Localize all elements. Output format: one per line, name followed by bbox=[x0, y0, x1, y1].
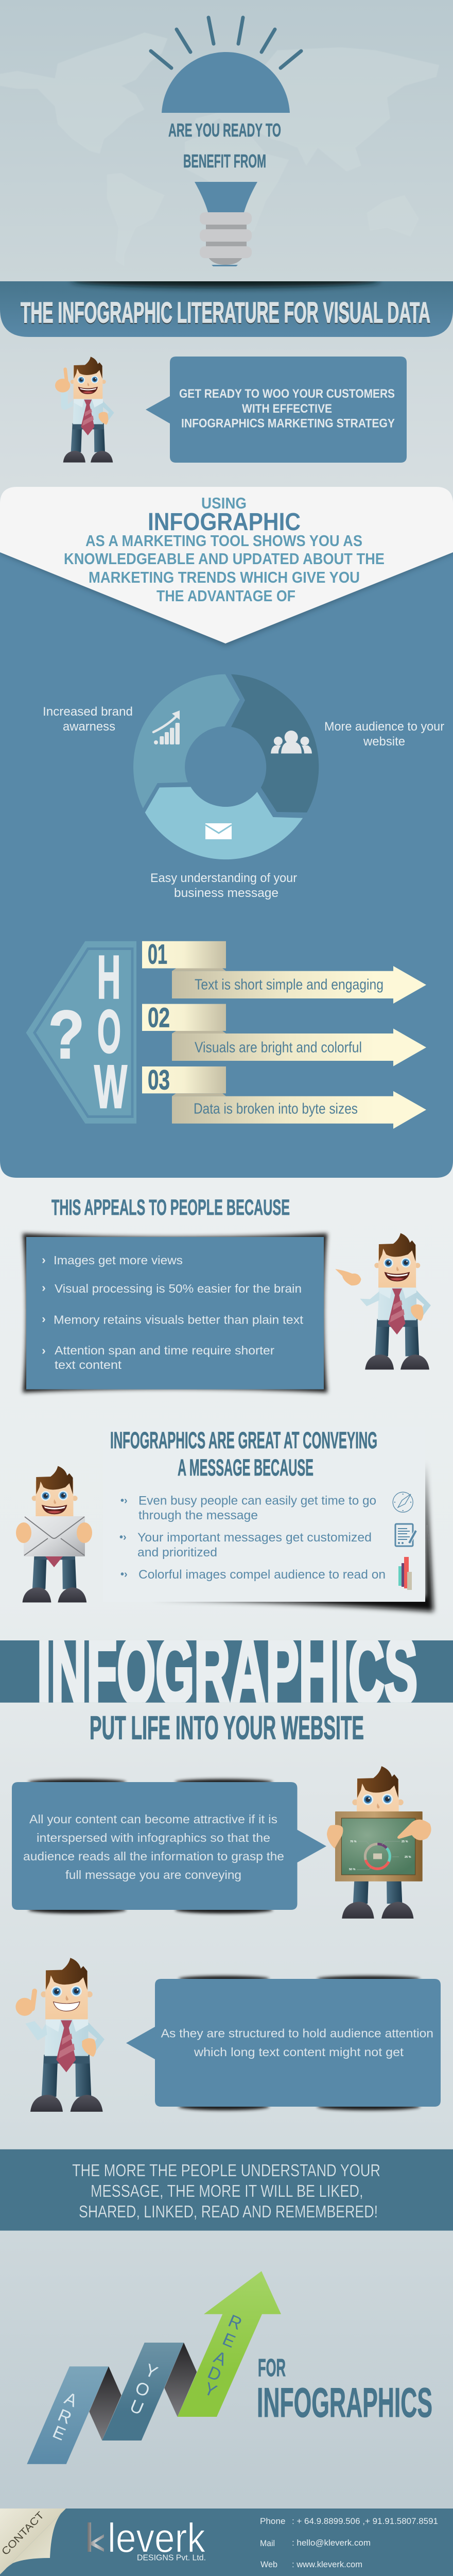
speech callout: hold attention: which long text content might not get bbox=[194, 2045, 404, 2059]
panel: appeals list: Images get more views bbox=[54, 1253, 183, 1267]
footer bbox=[0, 2509, 453, 2576]
envelope bbox=[24, 1516, 85, 1556]
heading: for infographics bbox=[257, 2354, 432, 2426]
donut labels bbox=[43, 705, 444, 900]
band: the more the people understand: SHARED, LINKED, READ AND REMEMBERED! bbox=[79, 2202, 378, 2222]
character: pointing finger bbox=[55, 357, 114, 463]
word: ready bbox=[201, 2311, 245, 2401]
panel: using infographic, blue section bbox=[0, 487, 453, 1178]
heading: are you ready to benefit from: BENEFIT FROM bbox=[183, 150, 266, 172]
donut labels: More audience to your bbox=[324, 720, 444, 734]
reasons list: through the message bbox=[138, 1509, 258, 1522]
character: presenting bbox=[335, 1233, 431, 1369]
badge: how? bbox=[26, 941, 136, 1124]
speech callout: attractive content: interspersed with infographics so that the bbox=[37, 1831, 270, 1844]
reasons list: Your important messages get customized bbox=[137, 1531, 372, 1545]
badge: how?: O bbox=[97, 997, 121, 1066]
ribbon step 02: 02 bbox=[148, 1002, 170, 1033]
reasons list: •› bbox=[119, 1532, 127, 1543]
ribbon step 03 bbox=[142, 1065, 426, 1129]
ribbon step 01: 01 bbox=[148, 939, 167, 970]
title banner bbox=[0, 281, 453, 337]
panel: appeals list: Attention span and time require shorter bbox=[55, 1344, 274, 1357]
speech callout: woo your customers: INFOGRAPHICS MARKETING STRATEGY bbox=[181, 416, 395, 431]
contact details: : hello@kleverk.com bbox=[292, 2538, 371, 2548]
icon: colourful bars bbox=[398, 1557, 412, 1590]
heading text: using infographic: THE ADVANTAGE OF bbox=[156, 587, 295, 605]
badge: how?: H bbox=[97, 943, 120, 1012]
icon: compass bbox=[393, 1492, 413, 1512]
reasons list bbox=[119, 1494, 386, 1582]
heading text: using infographic: USING bbox=[201, 494, 247, 512]
chalkboard: 50 % bbox=[349, 1868, 356, 1871]
speech callout: woo your customers bbox=[146, 357, 407, 463]
panel: appeals list: Memory retains visuals better than plain text bbox=[54, 1313, 303, 1327]
ribbon step 02: Visuals are bright and colorful bbox=[195, 1039, 362, 1056]
word: you: Y bbox=[142, 2360, 160, 2383]
panel: appeals list: › bbox=[42, 1253, 46, 1266]
panel: conveying a message bbox=[103, 1427, 433, 1612]
logo: kleverk: leverk bbox=[108, 2515, 206, 2561]
word: are: R bbox=[55, 2405, 74, 2428]
chalkboard: 76 % bbox=[350, 1840, 357, 1843]
bulb dome bbox=[162, 52, 290, 113]
hands bbox=[16, 1522, 92, 1543]
word: ready: E bbox=[220, 2329, 238, 2352]
band: the more the people understand bbox=[0, 2149, 453, 2231]
heading text: using infographic: AS A MARKETING TOOL SHOWS YOU AS bbox=[85, 532, 362, 550]
donut chart bbox=[133, 674, 319, 859]
band: the more the people understand: MESSAGE, THE MORE IT WILL BE LIKED, bbox=[91, 2182, 363, 2201]
bulb screw base bbox=[200, 212, 252, 266]
word: are: E bbox=[50, 2422, 68, 2445]
word: ready: D bbox=[205, 2363, 224, 2385]
heading text: using infographic bbox=[64, 494, 385, 605]
chalkboard: 25 % bbox=[405, 1856, 411, 1859]
panel: appeals list: Visual processing is 50% easier for the brain bbox=[55, 1282, 302, 1295]
contact details: : www.kleverk.com bbox=[292, 2560, 362, 2569]
panel: appeals list: text content bbox=[55, 1358, 121, 1371]
logo: kleverk: DESIGNS Pvt. Ltd. bbox=[137, 2553, 206, 2562]
heading text: using infographic: MARKETING TRENDS WHICH GIVE YOU bbox=[89, 568, 360, 586]
donut labels: awarness bbox=[63, 720, 115, 734]
panel: appeals list: › bbox=[42, 1344, 46, 1357]
badge: how?: ? bbox=[48, 997, 84, 1073]
word: are: A bbox=[62, 2388, 80, 2411]
speech callout: attractive content: All your content can become attractive if it is bbox=[29, 1812, 277, 1826]
panel: appeals list bbox=[23, 1233, 327, 1393]
world map backdrop bbox=[0, 32, 439, 266]
word: ready: Y bbox=[201, 2379, 219, 2401]
icon: growth chart bbox=[153, 710, 180, 744]
speech callout: hold attention bbox=[126, 1976, 441, 2110]
panel: appeals list: › bbox=[42, 1281, 46, 1294]
badge: how?: W bbox=[94, 1053, 127, 1121]
thumb hand bbox=[15, 1991, 34, 2016]
donut labels: Easy understanding of your bbox=[150, 871, 297, 885]
folded arrow: are you ready bbox=[27, 2271, 281, 2464]
icon: document and pen bbox=[395, 1524, 416, 1546]
grin bbox=[54, 2002, 80, 2011]
donut labels: Increased brand bbox=[43, 705, 133, 719]
band: the more the people understand: THE MORE THE PEOPLE UNDERSTAND YOUR bbox=[72, 2161, 380, 2180]
icon: audience bbox=[271, 731, 312, 753]
contact details: Phone bbox=[260, 2516, 285, 2526]
contact details bbox=[260, 2516, 438, 2569]
heading: infographics are great bbox=[110, 1427, 377, 1481]
donut labels: website bbox=[363, 735, 405, 749]
chalkboard: 25 % bbox=[402, 1840, 408, 1843]
ring chart on board bbox=[365, 1844, 390, 1869]
reasons list: •› bbox=[120, 1495, 128, 1506]
speech callout: attractive content bbox=[12, 1779, 326, 1913]
panel: appeals list: › bbox=[42, 1312, 46, 1325]
heading: for infographics: FOR bbox=[258, 2354, 286, 2382]
word: you bbox=[127, 2360, 160, 2419]
tie tip bbox=[45, 1556, 63, 1567]
word: ready: R bbox=[225, 2311, 245, 2334]
heading: are you ready to benefit from: ARE YOU READY TO bbox=[168, 120, 281, 141]
bulb neck bbox=[195, 182, 257, 212]
heading: are you ready to benefit from bbox=[168, 120, 281, 172]
heading: infographics are great: A MESSAGE BECAUSE bbox=[178, 1454, 313, 1481]
speech callout: hold attention: As they are structured to hold audience attention bbox=[161, 2027, 433, 2040]
hands bbox=[327, 1820, 431, 1849]
speech callout: attractive content: full message you are conveying bbox=[65, 1868, 241, 1882]
icon: bulb rays bbox=[151, 18, 301, 68]
word: you: U bbox=[127, 2396, 146, 2419]
character: holding chalkboard bbox=[327, 1766, 431, 1919]
word: ready: A bbox=[211, 2347, 230, 2370]
lightbulb with headline bbox=[151, 18, 301, 266]
speech callout: attractive content: audience reads all the information to grasp the bbox=[23, 1850, 284, 1863]
ribbon step 03: Data is broken into byte sizes bbox=[194, 1101, 358, 1117]
ribbon step 02 bbox=[142, 1002, 426, 1066]
character: holding envelope bbox=[16, 1466, 92, 1602]
word: you: O bbox=[132, 2378, 152, 2401]
reasons list: Colorful images compel audience to read on bbox=[138, 1568, 386, 1582]
white arrow header bbox=[0, 487, 453, 643]
heading text: using infographic: KNOWLEDGEABLE AND UPDATED ABOUT THE bbox=[64, 550, 385, 568]
speech callout: woo your customers: WITH EFFECTIVE bbox=[242, 402, 332, 416]
ribbon step 03: 03 bbox=[148, 1065, 170, 1096]
word: are bbox=[50, 2388, 80, 2445]
contact page curl: CONTACT bbox=[0, 2510, 46, 2557]
heading text: using infographic: INFOGRAPHIC bbox=[148, 509, 301, 536]
reasons list: and prioritized bbox=[137, 1546, 217, 1560]
heading: this appeals to people: THIS APPEALS TO PEOPLE BECAUSE bbox=[51, 1195, 290, 1220]
icon: envelope bbox=[205, 823, 232, 839]
ribbon step 01 bbox=[142, 939, 426, 1004]
band: infographics bbox=[0, 1640, 453, 1703]
donut labels: business message bbox=[174, 886, 278, 900]
ribbon step 01: Text is short simple and engaging bbox=[195, 977, 384, 993]
contact page curl bbox=[0, 2509, 66, 2574]
speech callout: woo your customers: GET READY TO WOO YOUR CUSTOMERS bbox=[179, 387, 395, 401]
character: thumbs up bbox=[15, 1958, 104, 2112]
contact details: Web bbox=[260, 2560, 277, 2569]
reasons list: •› bbox=[120, 1569, 128, 1580]
chalkboard bbox=[335, 1811, 423, 1882]
reasons list: Even busy people can easily get time to go bbox=[138, 1494, 376, 1507]
contact details: Mail bbox=[260, 2538, 275, 2548]
contact details: : + 64.9.8899.506 ,+ 91.91.5807.8591 bbox=[292, 2516, 438, 2526]
